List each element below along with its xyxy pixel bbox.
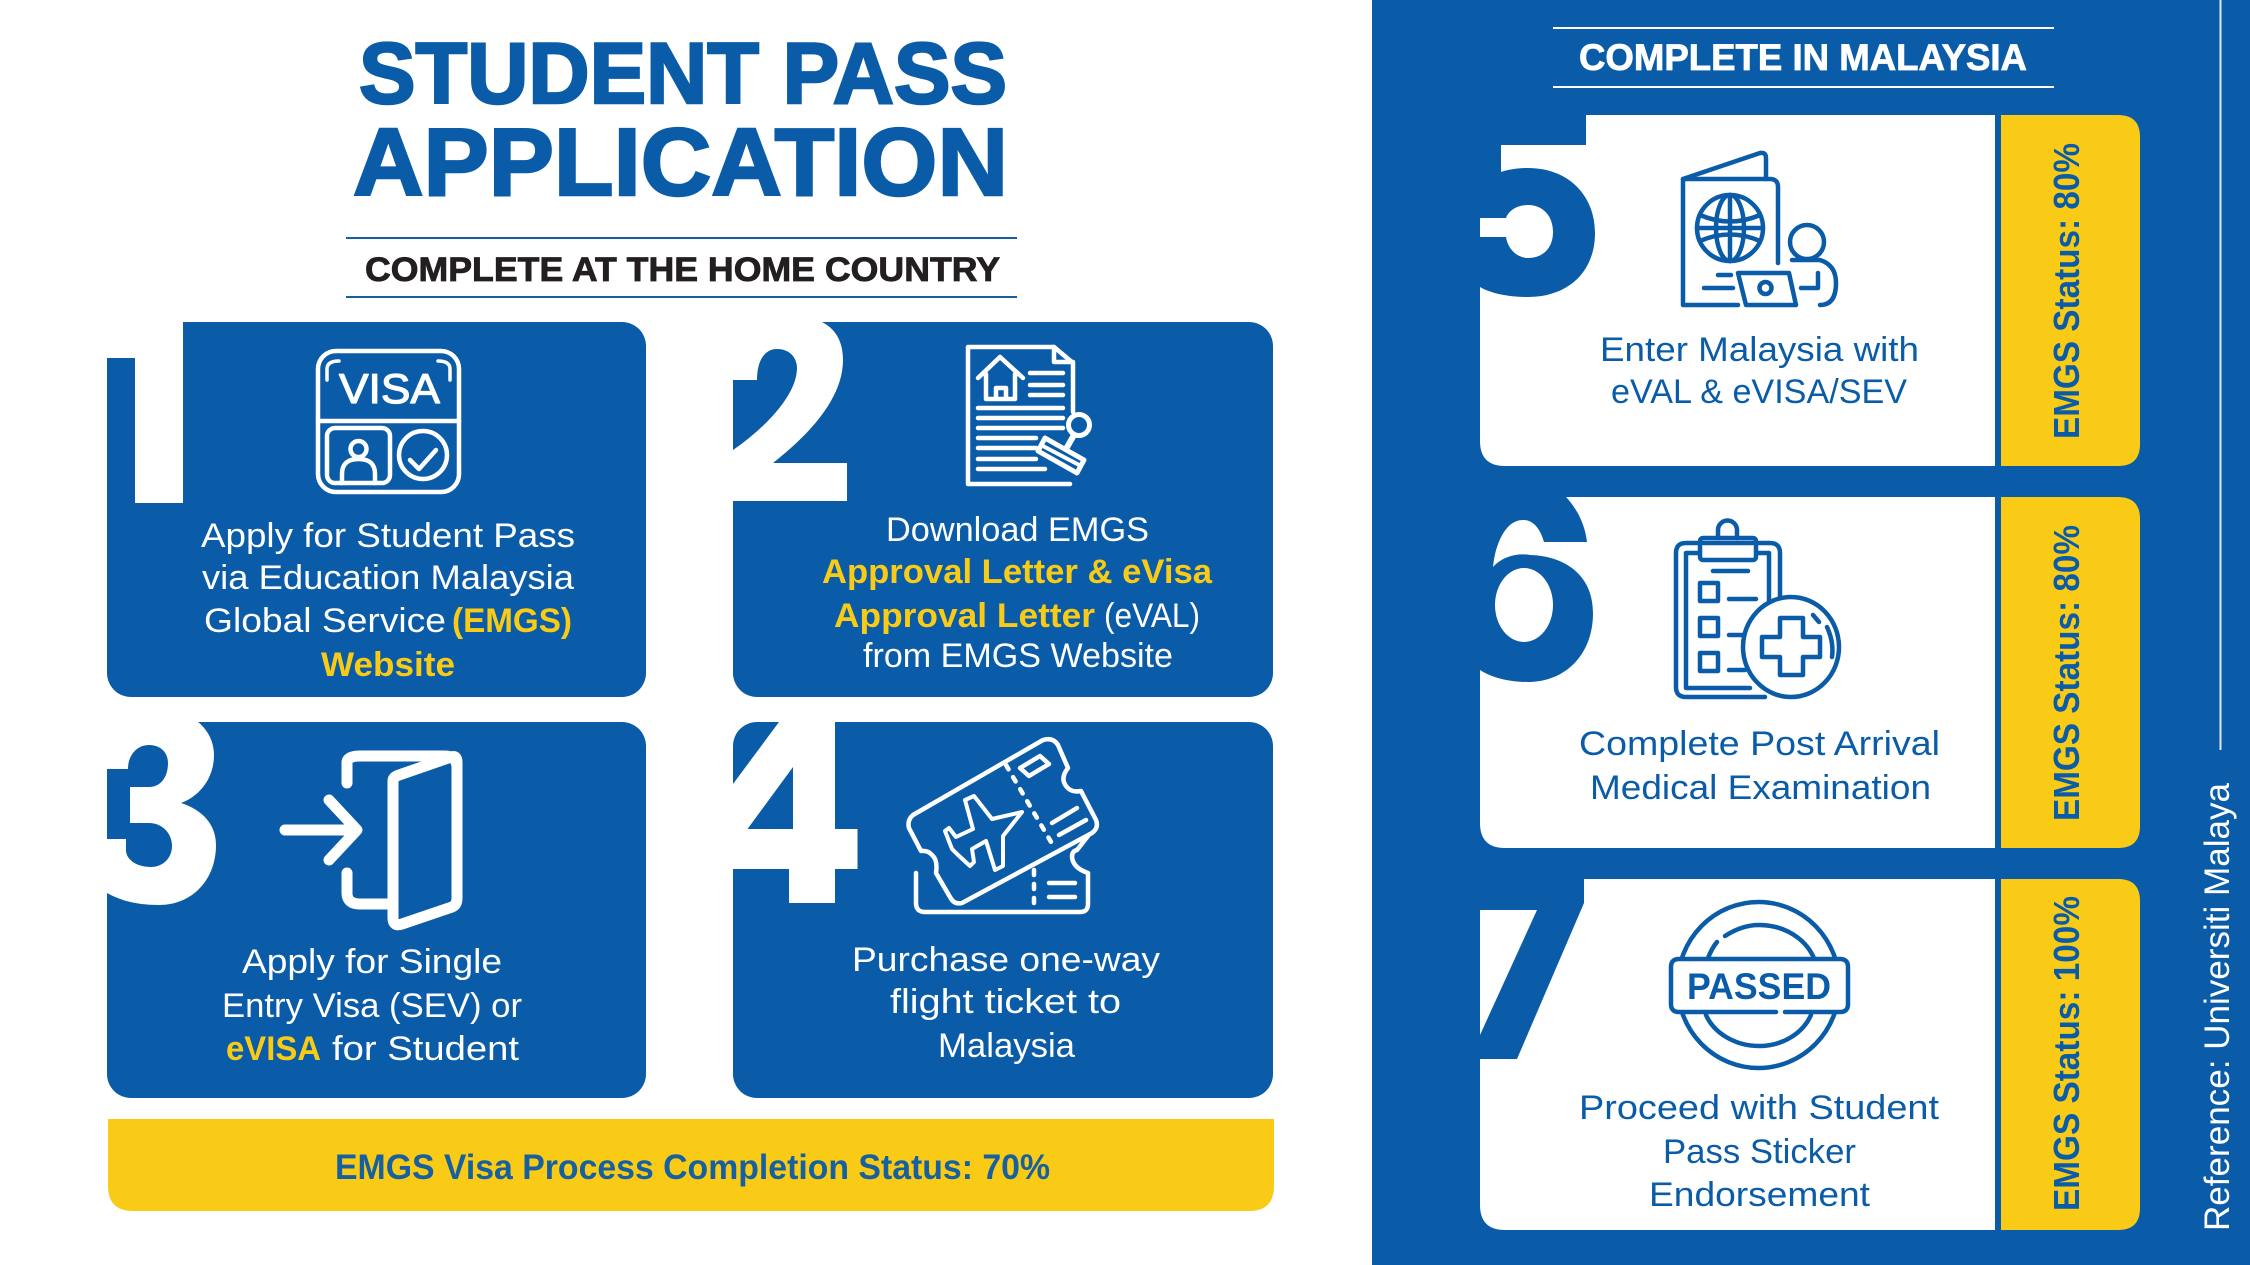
panel: step 1 — [107, 322, 646, 697]
text: step 3: Apply for Single — [242, 943, 502, 981]
text: step 1: (EMGS) — [452, 602, 572, 640]
icon: passed stamp — [1671, 902, 1848, 1068]
text: step 7: Endorsement — [1649, 1176, 1871, 1214]
panel: step 6 — [1480, 497, 2140, 848]
text: step 1: via Education Malaysia — [202, 559, 574, 597]
title: APPLICATION — [353, 109, 1008, 216]
icon: plane ticket — [908, 739, 1097, 912]
title: STUDENT PASS — [359, 26, 1007, 122]
text: step 1: Apply for Student Pass — [201, 517, 575, 555]
heading: complete at the home country: COMPLETE AT THE HOME COUNTRY — [365, 251, 1000, 289]
panel: step 5 — [1480, 115, 2140, 466]
panel: step 7 — [1480, 879, 2140, 1230]
text: step 7 — [1579, 1089, 1940, 1214]
icon: door with arrow — [285, 756, 457, 925]
status bar: home country completion: EMGS Visa Process Completion Status: 70% — [335, 1148, 1050, 1187]
text: step 7: Proceed with Student — [1579, 1089, 1940, 1127]
panel: step 3 — [107, 722, 646, 1098]
number 7 — [1480, 879, 1584, 1059]
text: step 1: Website — [321, 646, 455, 684]
text: step 6 — [1579, 725, 1940, 807]
text: step 2: Download EMGS — [886, 511, 1149, 549]
icon: document with stamp — [968, 347, 1090, 484]
heading: complete in Malaysia: COMPLETE IN MALAYSIA — [1579, 37, 2027, 78]
number 2 — [733, 322, 847, 501]
number 6 — [1480, 497, 1593, 682]
icon: visa: VISA — [339, 365, 440, 412]
text: step 1 — [201, 517, 575, 684]
text: step 5: eVAL & eVISA/SEV — [1611, 373, 1907, 411]
number 5 — [1480, 115, 1595, 297]
text: step 3: Entry Visa (SEV) or — [222, 987, 522, 1025]
status tab: 80% — [2001, 115, 2140, 466]
text: step 3: for Student — [332, 1030, 520, 1068]
text: step 2 — [822, 511, 1213, 675]
text: step 5 — [1600, 331, 1919, 411]
reference note: Reference: Universiti Malaya — [2198, 782, 2237, 1231]
status tab: 80% — [2001, 497, 2140, 848]
status tab: 100% — [2001, 879, 2140, 1230]
title — [353, 26, 1008, 216]
text: step 2: from EMGS Website — [863, 637, 1173, 675]
status tab: 100%: EMGS Status: 100% — [2046, 896, 2087, 1211]
panel: step 4 — [733, 722, 1273, 1098]
icon: passport and traveller — [1683, 153, 1836, 305]
vertical rule — [2220, 0, 2222, 750]
panel: complete in Malaysia — [1372, 0, 2250, 1265]
text: step 4: flight ticket to — [890, 983, 1121, 1021]
text: step 4 — [852, 941, 1160, 1065]
text: step 4: Malaysia — [938, 1027, 1075, 1065]
number 3 — [107, 722, 216, 905]
text: step 3 — [222, 943, 522, 1068]
text: step 2: (eVAL) — [1104, 597, 1200, 635]
text: step 4: Purchase one-way — [852, 941, 1160, 979]
text: step 2: Approval Letter & eVisa — [822, 553, 1213, 591]
status tab: 80%: EMGS Status: 80% — [2046, 525, 2087, 821]
text: step 6: Medical Examination — [1590, 769, 1931, 807]
text: step 2: Approval Letter — [834, 597, 1095, 635]
status tab: 80%: EMGS Status: 80% — [2046, 143, 2087, 439]
icon: medical checklist — [1676, 520, 1839, 697]
icon: passed stamp: PASSED — [1687, 966, 1831, 1007]
text: step 1: Global Service — [204, 602, 446, 640]
panel: step 2 — [733, 322, 1273, 697]
text: step 3: eVISA — [226, 1030, 321, 1068]
status bar: home country completion — [108, 1119, 1274, 1211]
text: step 7: Pass Sticker — [1663, 1133, 1856, 1171]
text: step 6: Complete Post Arrival — [1579, 725, 1940, 763]
text: step 5: Enter Malaysia with — [1600, 331, 1919, 369]
number 1 — [107, 322, 183, 503]
icon: visa — [318, 351, 459, 492]
number 4 — [733, 722, 858, 903]
